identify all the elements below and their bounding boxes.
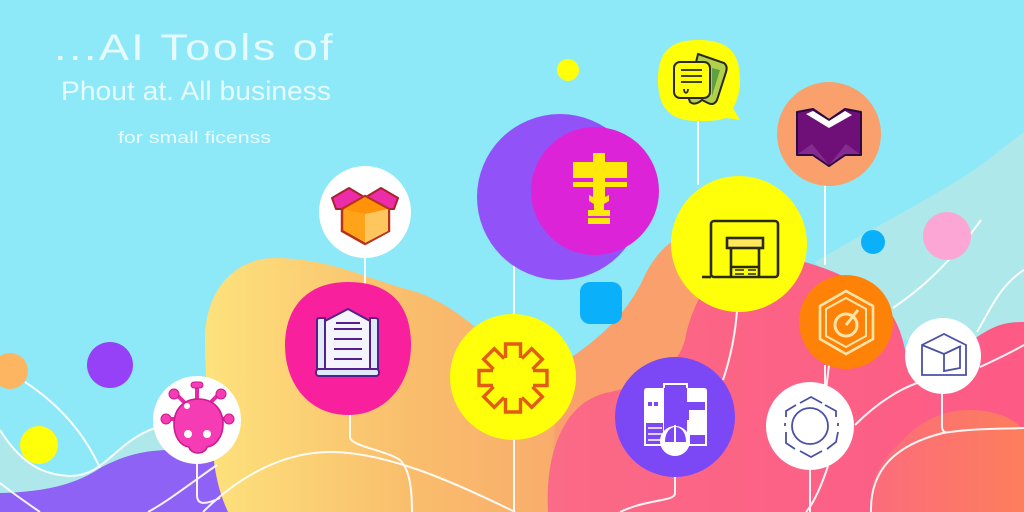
- node: storefront: [671, 176, 807, 312]
- node: open box: [319, 166, 411, 258]
- node: laptop document: [285, 282, 411, 415]
- node: note bubble: [658, 40, 740, 121]
- tagline: for small ficenss: [118, 128, 271, 147]
- background hills: [0, 132, 1024, 512]
- title: ...AI Tools of: [54, 27, 335, 68]
- node: dashed ring: [766, 382, 854, 470]
- node: scales: [477, 114, 659, 280]
- node: hexagon target: [799, 275, 893, 369]
- node: open book: [777, 82, 881, 186]
- decorative dots: [0, 59, 971, 464]
- subtitle: Phout at. All business: [61, 76, 331, 106]
- node: hospital: [615, 357, 735, 477]
- node: gear outline: [450, 314, 576, 440]
- node: virus skull: [153, 376, 241, 464]
- connector lines: [0, 120, 1024, 512]
- node: cube: [905, 318, 981, 394]
- title block: [54, 27, 335, 147]
